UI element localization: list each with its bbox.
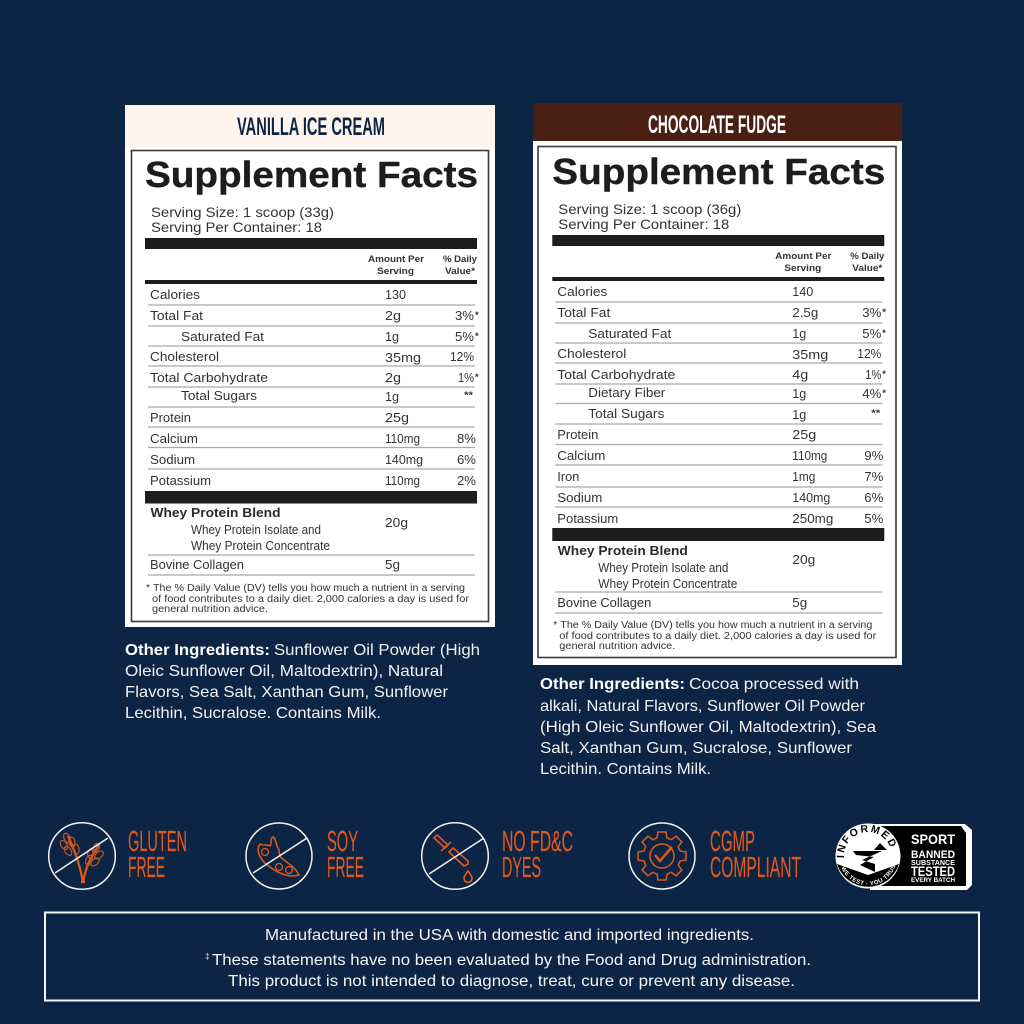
vanilla nutrient rows: 1g <box>385 329 399 344</box>
no dyes label: DYES <box>502 852 541 884</box>
chocolate other ingredients: (High Oleic Sunflower Oil, Maltodextrin), Sea <box>540 719 876 736</box>
vanilla nutrient rows: 2g <box>385 370 401 385</box>
cgmp compliant label <box>710 826 801 884</box>
soy free label <box>327 826 364 884</box>
vanilla heading: Supplement Facts <box>145 154 478 195</box>
vanilla other ingredients: Lecithin, Sucralose. Contains Milk. <box>125 705 381 722</box>
vanilla nutrient rows: 2g <box>385 308 401 323</box>
vanilla footnote: * <box>146 583 150 594</box>
vanilla header band <box>125 105 495 148</box>
vanilla protein blend: 5g <box>385 557 400 572</box>
vanilla other ingredients: Flavors, Sea Salt, Xanthan Gum, Sunflower <box>125 684 449 701</box>
badge: informed sport: SUBSTANCE <box>911 860 955 867</box>
disclaimer box: This product is not intended to diagnose, treat, cure or prevent any disease. <box>228 973 795 990</box>
vanilla column headers <box>368 254 478 277</box>
vanilla header band: VANILLA ICE CREAM <box>237 113 385 141</box>
vanilla nutrient rows: Sodium <box>150 452 195 467</box>
vanilla nutrient rows: 2% <box>457 473 476 488</box>
chocolate other ingredients: Other Ingredients: <box>540 676 685 693</box>
vanilla nutrient rows: Total Fat <box>150 308 203 323</box>
chocolate nutrient rows: 3% <box>862 305 882 320</box>
icon: gluten free wheat <box>49 823 115 889</box>
chocolate nutrient rows: 6% <box>864 490 884 505</box>
chocolate nutrient rows: 110mg <box>792 448 827 463</box>
disclaimer box: Manufactured in the USA with domestic and imported ingredients. <box>265 927 754 944</box>
chocolate footnote: * <box>553 620 557 631</box>
chocolate other ingredients: Salt, Xanthan Gum, Sucralose, Sunflower <box>540 740 853 757</box>
disclaimer box: These statements have no been evaluated by the Food and Drug administration. <box>212 952 811 969</box>
chocolate nutrient rows: 9% <box>864 448 884 463</box>
chocolate footnote: general nutrition advice. <box>559 641 675 652</box>
chocolate nutrient rows: * <box>882 307 886 318</box>
chocolate serving info <box>558 201 741 232</box>
chocolate nutrient rows: 1% <box>865 367 882 382</box>
chocolate nutrient rows: 4% <box>862 386 882 401</box>
icon: no dyes dropper <box>422 823 488 889</box>
vanilla nutrient rows: 110mg <box>385 431 420 446</box>
chocolate nutrient rows: 5% <box>864 511 884 526</box>
badge: informed sport: EVERY BATCH <box>911 878 955 884</box>
vanilla protein blend: Whey Protein Blend <box>150 505 281 520</box>
chocolate column headers: % Daily <box>850 251 885 262</box>
vanilla nutrient rows: 110mg <box>385 473 420 488</box>
vanilla column headers: % Daily <box>443 254 478 265</box>
vanilla column headers: Value* <box>445 266 475 277</box>
chocolate nutrient rows: 7% <box>864 469 884 484</box>
chocolate nutrient rows: 140mg <box>792 490 830 505</box>
chocolate nutrient rows: Potassium <box>557 511 618 526</box>
vanilla nutrient rows: 12% <box>450 349 474 364</box>
chocolate nutrient rows: ** <box>871 408 881 419</box>
vanilla nutrient rows: 5% <box>455 329 474 344</box>
vanilla protein blend: 20g <box>385 515 408 530</box>
vanilla nutrient rows: Total Sugars <box>181 388 258 403</box>
gluten free label: FREE <box>128 852 165 884</box>
chocolate header band: CHOCOLATE FUDGE <box>648 111 786 139</box>
chocolate nutrient rows: Protein <box>557 427 598 442</box>
vanilla nutrient rows: 3% <box>455 308 474 323</box>
panel: vanilla ice cream supplement facts <box>125 105 495 627</box>
chocolate nutrient rows: 250mg <box>792 511 833 526</box>
vanilla nutrient rows: 8% <box>457 431 476 446</box>
vanilla other ingredients: Other Ingredients: <box>125 642 270 659</box>
chocolate column headers: Amount Per <box>775 251 832 262</box>
chocolate nutrient rows: * <box>882 388 886 399</box>
vanilla serving info: Serving Size: 1 scoop (33g) <box>151 204 334 220</box>
vanilla nutrient rows: 35mg <box>385 350 421 365</box>
chocolate serving info: Serving Size: 1 scoop (36g) <box>558 201 741 217</box>
chocolate nutrient rows: Cholesterol <box>557 346 626 361</box>
chocolate nutrient rows: 1g <box>792 407 806 422</box>
chocolate nutrient rows: * <box>882 369 886 380</box>
chocolate nutrient rows: 12% <box>857 346 882 361</box>
icon: soy free bean pod <box>246 823 312 889</box>
badge: informed sport: BANNED <box>911 849 955 861</box>
vanilla nutrient rows: 130 <box>385 287 406 302</box>
chocolate nutrient rows <box>557 284 886 526</box>
icon: cgmp gear check <box>629 823 695 889</box>
vanilla nutrient rows: ** <box>464 390 473 401</box>
vanilla footnote <box>146 583 470 615</box>
badge: informed sport: TESTED <box>911 864 955 879</box>
vanilla nutrient rows: 25g <box>385 410 409 425</box>
vanilla nutrient rows: Cholesterol <box>150 349 219 364</box>
chocolate protein blend: 5g <box>792 595 807 610</box>
vanilla nutrient rows: 1g <box>385 389 399 404</box>
chocolate protein blend: Whey Protein Isolate and <box>598 560 728 575</box>
panel: chocolate fudge supplement facts <box>533 103 902 665</box>
cgmp compliant label: COMPLIANT <box>710 852 801 884</box>
chocolate protein blend: Bovine Collagen <box>557 595 651 610</box>
no dyes label: NO FD&C <box>502 826 573 858</box>
disclaimer box: ‡ <box>205 952 209 961</box>
vanilla other ingredients <box>125 642 480 722</box>
disclaimer box <box>45 912 979 1000</box>
vanilla protein blend: Whey Protein Concentrate <box>191 538 330 553</box>
vanilla serving info: Serving Per Container: 18 <box>151 219 322 235</box>
chocolate nutrient rows: Total Fat <box>557 305 611 320</box>
chocolate nutrient rows: 5% <box>862 326 882 341</box>
chocolate nutrient rows: 140 <box>792 284 813 299</box>
vanilla serving info <box>151 204 334 235</box>
vanilla nutrient rows <box>150 287 479 488</box>
chocolate nutrient rows: Total Carbohydrate <box>557 367 675 382</box>
gluten free label <box>128 826 187 884</box>
chocolate protein blend: 20g <box>792 552 815 567</box>
chocolate column headers: Value* <box>852 263 883 274</box>
vanilla nutrient rows: Protein <box>150 410 191 425</box>
vanilla footnote: of food contributes to a daily diet. 2,000 calories a day is used for <box>152 594 470 605</box>
chocolate heading: Supplement Facts <box>552 151 885 192</box>
chocolate nutrient rows: 4g <box>792 367 808 382</box>
vanilla nutrient rows: 1% <box>458 370 474 385</box>
chocolate nutrient rows: 1g <box>792 326 806 341</box>
chocolate nutrient rows: Dietary Fiber <box>588 385 666 400</box>
chocolate serving info: Serving Per Container: 18 <box>558 216 730 232</box>
vanilla nutrient rows: Total Carbohydrate <box>150 370 268 385</box>
chocolate header band <box>533 103 902 141</box>
vanilla other ingredients: Oleic Sunflower Oil, Maltodextrin), Natural <box>125 663 443 680</box>
chocolate nutrient rows: 1mg <box>792 469 815 484</box>
chocolate protein blend <box>557 543 815 610</box>
no dyes label <box>502 826 573 884</box>
vanilla column headers: Amount Per <box>368 254 424 265</box>
vanilla nutrient rows: * <box>475 331 479 342</box>
chocolate footnote: of food contributes to a daily diet. 2,000 calories a day is used for <box>559 631 877 642</box>
chocolate protein blend: Whey Protein Blend <box>558 543 688 558</box>
vanilla protein blend: Bovine Collagen <box>150 557 244 572</box>
chocolate other ingredients <box>540 676 876 778</box>
badge: informed sport: INFORMED <box>836 825 896 858</box>
vanilla protein blend: Whey Protein Isolate and <box>191 522 321 537</box>
chocolate nutrient rows: Saturated Fat <box>588 326 672 341</box>
text: FREE <box>327 852 364 884</box>
vanilla nutrient rows: * <box>475 372 479 383</box>
chocolate nutrient rows: Calories <box>557 284 608 299</box>
gluten free label: GLUTEN <box>128 826 187 858</box>
chocolate facts content <box>552 151 886 652</box>
chocolate nutrient rows: * <box>882 328 886 339</box>
chocolate footnote <box>553 620 877 652</box>
chocolate nutrient rows: Iron <box>557 469 579 484</box>
chocolate nutrient rows: Sodium <box>557 490 602 505</box>
badge: informed sport: WE TEST · YOU TRUST <box>842 866 896 886</box>
vanilla nutrient rows: Calcium <box>150 431 198 446</box>
chocolate protein blend: Whey Protein Concentrate <box>598 576 737 591</box>
vanilla footnote: general nutrition advice. <box>152 604 268 615</box>
chocolate other ingredients: Lecithin. Contains Milk. <box>540 761 711 778</box>
chocolate nutrient rows: 2.5g <box>792 305 818 320</box>
badge: informed sport: SPORT <box>911 831 955 847</box>
soy free label: SOY <box>327 826 358 858</box>
vanilla nutrient rows: * <box>475 310 479 321</box>
chocolate column headers <box>775 251 885 274</box>
chocolate nutrient rows: 35mg <box>792 347 828 362</box>
chocolate other ingredients: alkali, Natural Flavors, Sunflower Oil Powder <box>540 698 866 715</box>
vanilla nutrient rows: 140mg <box>385 452 423 467</box>
vanilla column headers: Serving <box>377 266 414 277</box>
chocolate nutrient rows: Total Sugars <box>588 406 665 421</box>
vanilla nutrient rows: Calories <box>150 287 201 302</box>
chocolate column headers: Serving <box>784 263 821 274</box>
chocolate nutrient rows: Calcium <box>557 448 605 463</box>
vanilla other ingredients: Sunflower Oil Powder (High <box>274 642 480 659</box>
cgmp compliant label: CGMP <box>710 826 755 858</box>
chocolate other ingredients: Cocoa processed with <box>689 676 859 693</box>
vanilla protein blend <box>150 505 408 572</box>
chocolate nutrient rows: 25g <box>792 427 816 442</box>
vanilla footnote: The % Daily Value (DV) tells you how much a nutrient in a serving <box>153 583 465 594</box>
vanilla nutrient rows: Potassium <box>150 473 211 488</box>
vanilla nutrient rows: 6% <box>457 452 476 467</box>
vanilla nutrient rows: Saturated Fat <box>181 329 264 344</box>
chocolate footnote: The % Daily Value (DV) tells you how much a nutrient in a serving <box>560 620 872 631</box>
chocolate nutrient rows: 1g <box>792 386 806 401</box>
